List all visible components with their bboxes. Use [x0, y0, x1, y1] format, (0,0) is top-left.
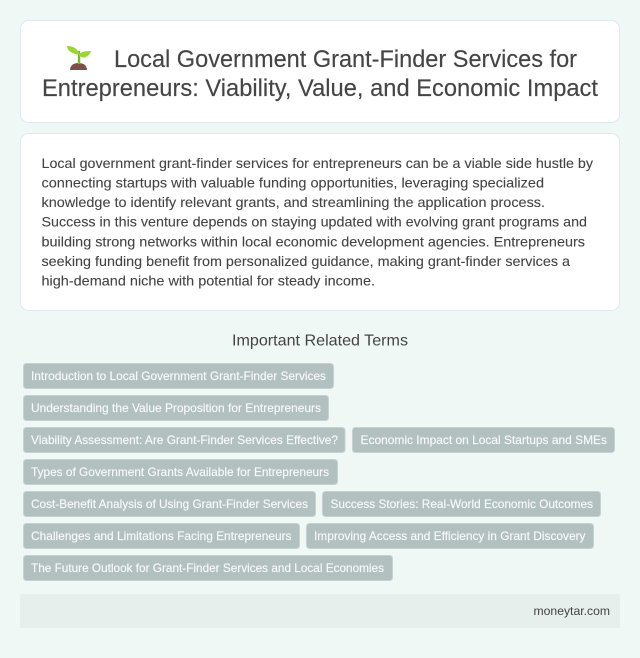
tag: [24, 556, 392, 580]
text block: summary: Local government grant-finder services for entrepreneurs can be a viable side hustle by: [42, 155, 593, 171]
tag: [24, 524, 300, 548]
tag: [24, 460, 338, 484]
footer: [20, 594, 620, 628]
title: Entrepreneurs: Viability, Value, and Economic Impact: [42, 75, 598, 102]
tag: [322, 492, 600, 516]
title: [42, 46, 598, 102]
tag: Understanding the Value Proposition for Entrepreneurs: [31, 401, 321, 415]
tag: Improving Access and Efficiency in Grant Discovery: [314, 529, 586, 543]
tag: [24, 364, 334, 388]
tag: Types of Government Grants Available for Entrepreneurs: [31, 465, 329, 479]
text block: summary: connecting startups with valuable funding opportunities, leveraging specialized: [42, 174, 544, 190]
tag: Economic Impact on Local Startups and SMEs: [360, 433, 607, 447]
tag: Introduction to Local Government Grant-Finder Services: [31, 369, 326, 383]
panel: title card: [20, 20, 620, 122]
tag: Success Stories: Real-World Economic Outcomes: [330, 497, 593, 511]
text block: summary: [42, 155, 593, 288]
text block: summary: knowledge to identify relevant grants, and streamlining the application process.: [42, 194, 545, 210]
icon: sprout: [67, 46, 91, 70]
heading: related terms: Important Related Terms: [232, 332, 408, 350]
footer source: moneytar.com: [534, 604, 610, 618]
text block: summary: seeking funding benefit from personalized guidance, making grant-finder services a: [42, 253, 570, 269]
tag list: related terms: [24, 364, 614, 580]
tag: [24, 428, 345, 452]
tag: [24, 396, 328, 420]
title: Local Government Grant-Finder Services for: [114, 46, 577, 73]
tag: [24, 492, 316, 516]
tag: The Future Outlook for Grant-Finder Services and Local Economies: [31, 561, 384, 575]
tag: Challenges and Limitations Facing Entrepreneurs: [31, 529, 292, 543]
text block: summary: building strong networks within local economic development agencies. Entrepreneurs: [42, 234, 585, 250]
text block: summary: high-demand niche with potential for steady income.: [42, 272, 375, 288]
tag: [306, 524, 594, 548]
tag: [352, 428, 614, 452]
tag: Cost-Benefit Analysis of Using Grant-Finder Services: [31, 497, 308, 511]
panel: summary paragraph: [20, 134, 620, 310]
tag: Viability Assessment: Are Grant-Finder Services Effective?: [31, 433, 338, 447]
text block: summary: Success in this venture depends on staying updated with evolving grant programs and: [42, 214, 587, 230]
